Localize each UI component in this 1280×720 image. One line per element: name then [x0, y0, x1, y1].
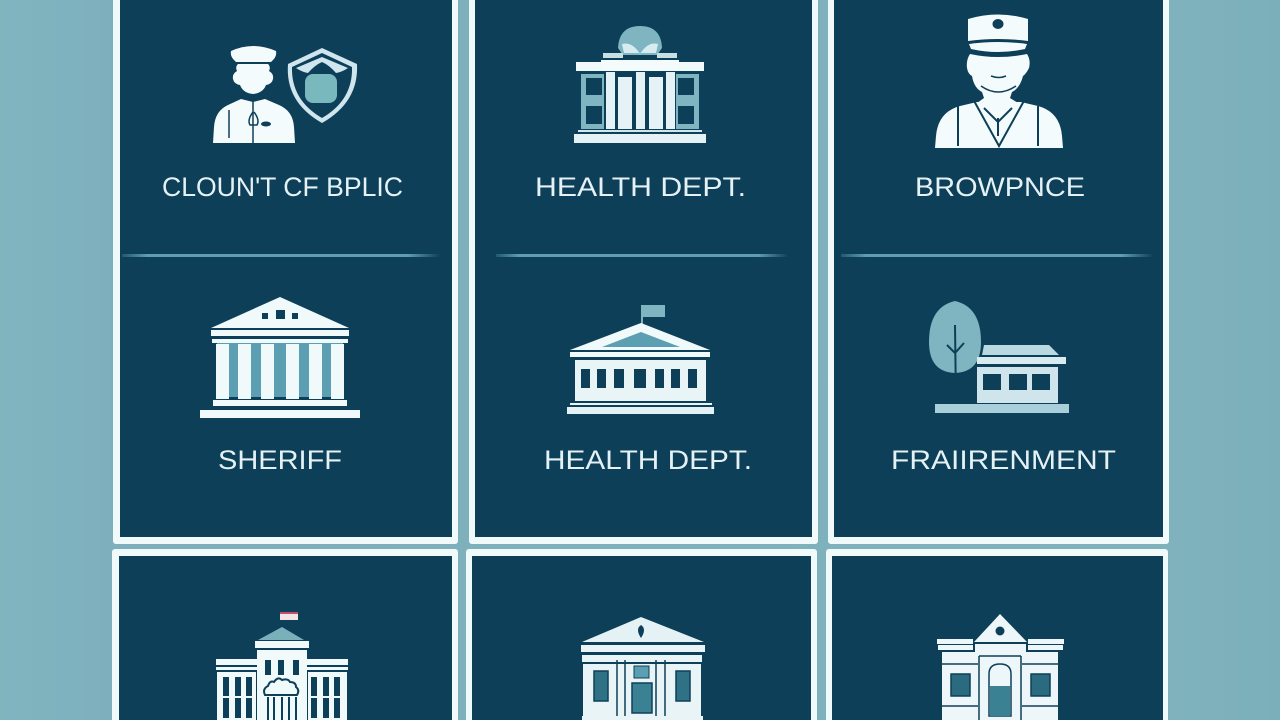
icon: small courthouse — [937, 614, 1064, 720]
icon: tree and small building — [929, 301, 1069, 413]
panel: top right — [828, 0, 1169, 544]
heading: cloun't cf bplic: CLOUN'T CF BPLIC — [162, 172, 403, 202]
icon: officer and shield — [213, 46, 357, 143]
panel: top left — [113, 0, 458, 544]
label: frairenment: FRAIIRENMENT — [891, 445, 1116, 475]
divider line — [841, 254, 1153, 257]
icon: domed building — [574, 26, 706, 143]
panel: bottom middle — [466, 549, 817, 720]
heading: browpnce: BROWPNCE — [915, 172, 1085, 202]
icon: government building with flag — [567, 305, 714, 414]
panel: bottom right — [826, 549, 1168, 720]
icon: capitol building — [216, 612, 348, 720]
divider line — [122, 254, 440, 257]
panel: bottom left — [112, 549, 458, 720]
icon: columned building — [200, 297, 360, 418]
label: sheriff: SHERIFF — [218, 445, 342, 475]
icon: uniformed officer — [935, 14, 1063, 148]
label: health dept.: HEALTH DEPT. — [544, 445, 752, 475]
icon: pediment library — [581, 617, 705, 720]
heading: health dept.: HEALTH DEPT. — [535, 172, 746, 202]
divider line — [496, 254, 788, 257]
panel: top middle — [469, 0, 818, 544]
